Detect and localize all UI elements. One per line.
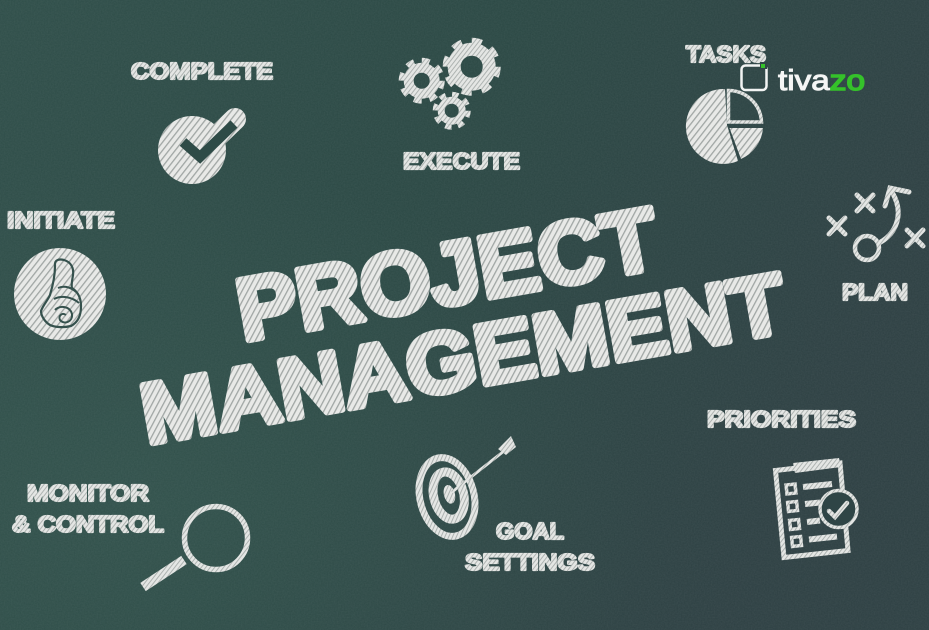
title: Project Management: [134, 188, 792, 463]
title: Project Management: PROJECT: [229, 188, 665, 360]
icon: magnifying glass: [143, 506, 248, 587]
label: initiate: INITIATE: [7, 207, 115, 233]
icon: play plan: [829, 188, 923, 260]
icon: gears: [402, 41, 498, 127]
icon: check mark badge: [158, 116, 235, 184]
icon: pie chart: [686, 89, 763, 164]
label: monitor & control: MONITOR: [27, 480, 149, 506]
title: Project Management: MANAGEMENT: [134, 256, 792, 463]
label: monitor & control: [12, 480, 164, 537]
label: execute: EXECUTE: [403, 148, 520, 174]
label: monitor & control: & CONTROL: [12, 511, 164, 537]
label: goal settings: SETTINGS: [465, 549, 595, 575]
icon: thumbs up badge: [14, 248, 106, 340]
logo: tivazo: tivazo: [778, 65, 865, 97]
label: plan: PLAN: [842, 279, 908, 305]
icon: target with arrow: [411, 436, 516, 542]
label: goal settings: GOAL: [496, 518, 564, 544]
label: complete: COMPLETE: [131, 58, 273, 84]
icon: clipboard checklist: [776, 458, 857, 558]
label: goal settings: [465, 518, 595, 575]
logo: tivazo: [742, 62, 865, 97]
label: priorities: PRIORITIES: [707, 406, 856, 432]
label: tasks: TASKS: [686, 41, 766, 67]
